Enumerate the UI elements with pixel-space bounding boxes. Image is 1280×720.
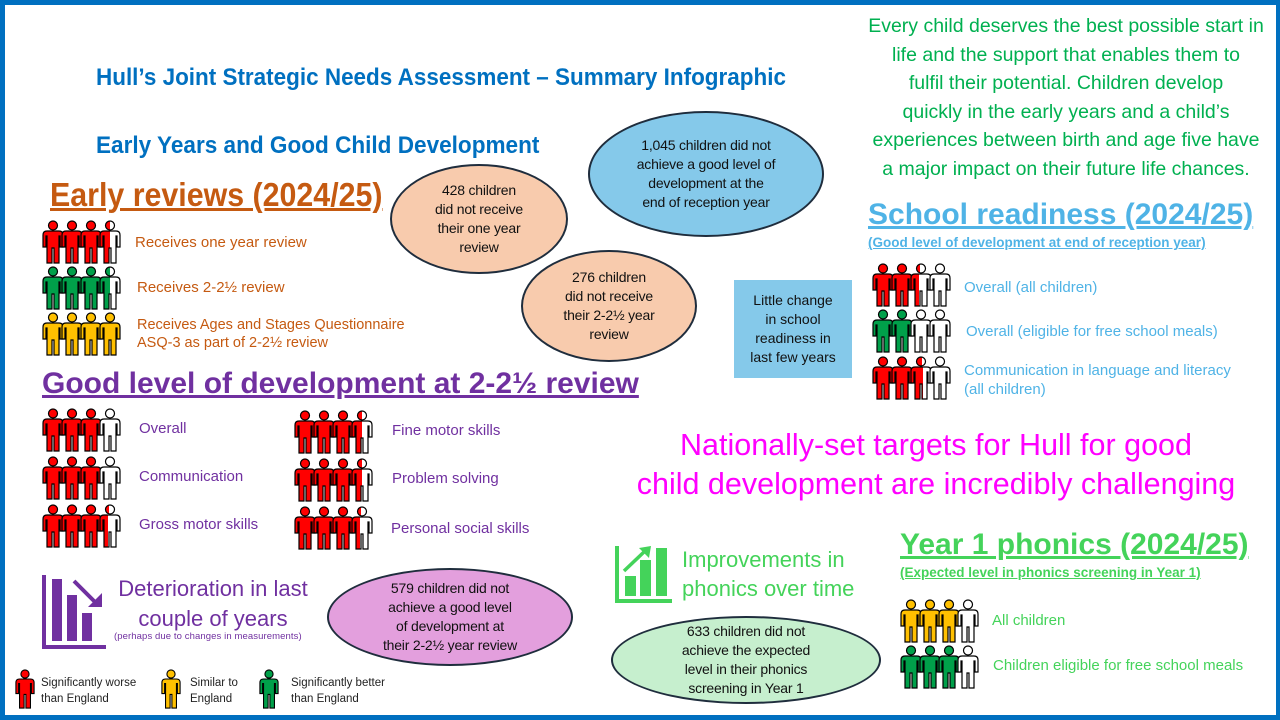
- icon row: FSM: [872, 309, 951, 353]
- callout: 276 children: 276 children: [572, 269, 646, 285]
- callout: 633 children: [611, 616, 881, 704]
- callout box: little change: in school: [765, 311, 821, 327]
- text: communication: [964, 362, 1231, 398]
- quote text: experiences between birth and age five have: [872, 129, 1260, 151]
- panel: phonics rows: [900, 599, 1243, 689]
- text: FSM: Overall (eligible for free school meals): [966, 323, 1218, 340]
- title: Hull’s Joint Strategic Needs Assessment – Summary Infographic: [96, 64, 786, 91]
- text: deterioration: Deterioration in last: [118, 576, 308, 601]
- heading: year 1 phonics: Year 1 phonics (2024/25): [900, 528, 1249, 561]
- callout: 633 children: achieve the expected: [682, 642, 810, 658]
- icon row: fine motor: [294, 410, 373, 454]
- text: communication: Communication in language and literacy: [964, 362, 1231, 379]
- callout box: little change: [734, 280, 852, 378]
- text: improvements: Improvements in: [682, 547, 845, 572]
- text: overall: Overall: [139, 420, 187, 437]
- text: fine motor: Fine motor skills: [392, 422, 500, 439]
- icon row: communication: [872, 356, 951, 400]
- icon row: one year review: [42, 220, 121, 264]
- text: ASQ-3: ASQ-3 as part of 2-2½ review: [137, 335, 328, 351]
- callout: 276 children: [521, 250, 697, 362]
- icon row: problem solving: [294, 458, 373, 502]
- text: overall: Overall (all children): [964, 279, 1097, 296]
- text: communication: Communication: [139, 468, 243, 485]
- panel: school readiness rows: [872, 263, 1231, 400]
- callout: 633 children: screening in Year 1: [688, 680, 804, 696]
- callout: 276 children: did not receive: [565, 288, 653, 304]
- heading: school readiness: School readiness (2024/25): [868, 198, 1253, 231]
- legend: [15, 669, 385, 709]
- icon row: all children: [900, 599, 979, 643]
- text: all children: All children: [992, 612, 1065, 629]
- callout: 579 children: 579 children did not: [391, 580, 509, 596]
- text: FSM: Children eligible for free school meals: [993, 657, 1243, 674]
- targets statement: child development are incredibly challenging: [637, 467, 1235, 501]
- legend: Significantly worse: [41, 677, 136, 689]
- icon row: overall: [872, 263, 951, 307]
- callout: 428 children: review: [459, 239, 499, 255]
- legend: better: [259, 669, 279, 709]
- heading: early reviews: Early reviews (2024/25): [50, 176, 383, 213]
- quote text: [868, 15, 1264, 180]
- text: ASQ-3: [137, 317, 405, 351]
- panel: early reviews rows: [42, 220, 405, 356]
- text: personal social: Personal social skills: [391, 520, 529, 537]
- panel: good level of development rows: [42, 408, 529, 550]
- text: deterioration: [118, 576, 308, 631]
- note: measurement changes: (perhaps due to changes in measurements): [114, 631, 302, 642]
- quote text: Every child deserves the best possible start in: [868, 15, 1264, 37]
- callout box: little change: readiness in: [755, 330, 831, 346]
- icon row: communication: [42, 456, 121, 500]
- callout: 1,045 children: development at the: [648, 175, 764, 191]
- text: ASQ-3: Receives Ages and Stages Questionnaire: [137, 317, 405, 333]
- icon row: 2-2½ review: [42, 266, 121, 310]
- icon row: personal social: [294, 506, 373, 550]
- icon: improvement chart: [615, 546, 672, 603]
- callout: 1,045 children: 1,045 children did not: [641, 137, 771, 153]
- subtitle: Early Years and Good Child Development: [96, 132, 539, 159]
- subheading: phonics: (Expected level in phonics screening in Year 1): [900, 565, 1201, 580]
- callout: 579 children: their 2-2½ year review: [383, 637, 517, 653]
- callout: 428 children: 428 children: [442, 182, 516, 198]
- text: improvements: phonics over time: [682, 576, 854, 601]
- text: one year review: Receives one year review: [135, 234, 307, 251]
- callout: 1,045 children: achieve a good level of: [637, 156, 775, 172]
- text: gross motor: Gross motor skills: [139, 516, 258, 533]
- icon row: overall: [42, 408, 121, 452]
- callout: 633 children: 633 children did not: [687, 623, 805, 639]
- callout: 633 children: level in their phonics: [685, 661, 807, 677]
- icon row: gross motor: [42, 504, 121, 548]
- callout: 276 children: review: [589, 326, 629, 342]
- legend: worse: [15, 669, 35, 709]
- text: communication: (all children): [964, 381, 1046, 398]
- quote text: a major impact on their future life chances.: [882, 158, 1250, 180]
- legend: Significantly better: [291, 677, 385, 689]
- callout: 1,045 children: [588, 111, 824, 237]
- icon: deterioration chart: [42, 575, 106, 649]
- targets statement: Nationally-set targets for Hull for good: [680, 428, 1192, 462]
- callout: 579 children: achieve a good level: [388, 599, 512, 615]
- icon row: FSM: [900, 645, 979, 689]
- callout: 428 children: their one year: [438, 220, 520, 236]
- targets statement: [637, 428, 1235, 501]
- callout: 579 children: of development at: [396, 618, 504, 634]
- legend: than England: [291, 693, 359, 705]
- quote text: fulfil their potential. Children develop: [909, 72, 1223, 94]
- callout box: little change: Little change: [753, 292, 833, 308]
- text: problem solving: Problem solving: [392, 470, 499, 487]
- subheading: school readiness: (Good level of development at end of reception year): [868, 235, 1206, 250]
- quote text: life and the support that enables them to: [892, 44, 1240, 66]
- legend: England: [190, 693, 232, 705]
- callout: 428 children: [390, 164, 568, 274]
- text: 2-2½ review: Receives 2-2½ review: [137, 279, 285, 296]
- text: deterioration: couple of years: [138, 606, 288, 631]
- legend: than England: [41, 693, 109, 705]
- callout: 428 children: did not receive: [435, 201, 523, 217]
- legend: similar: [161, 669, 181, 709]
- callout: 1,045 children: end of reception year: [642, 194, 770, 210]
- text: improvements: [682, 547, 854, 601]
- quote text: quickly in the early years and a child’s: [902, 101, 1229, 123]
- icon row: ASQ-3: [42, 312, 121, 356]
- legend: Similar to: [190, 677, 238, 689]
- callout box: little change: last few years: [750, 349, 836, 365]
- callout: 276 children: their 2-2½ year: [563, 307, 655, 323]
- callout: 579 children: [327, 568, 573, 666]
- heading: good level of development: Good level of development at 2-2½ review: [42, 367, 639, 400]
